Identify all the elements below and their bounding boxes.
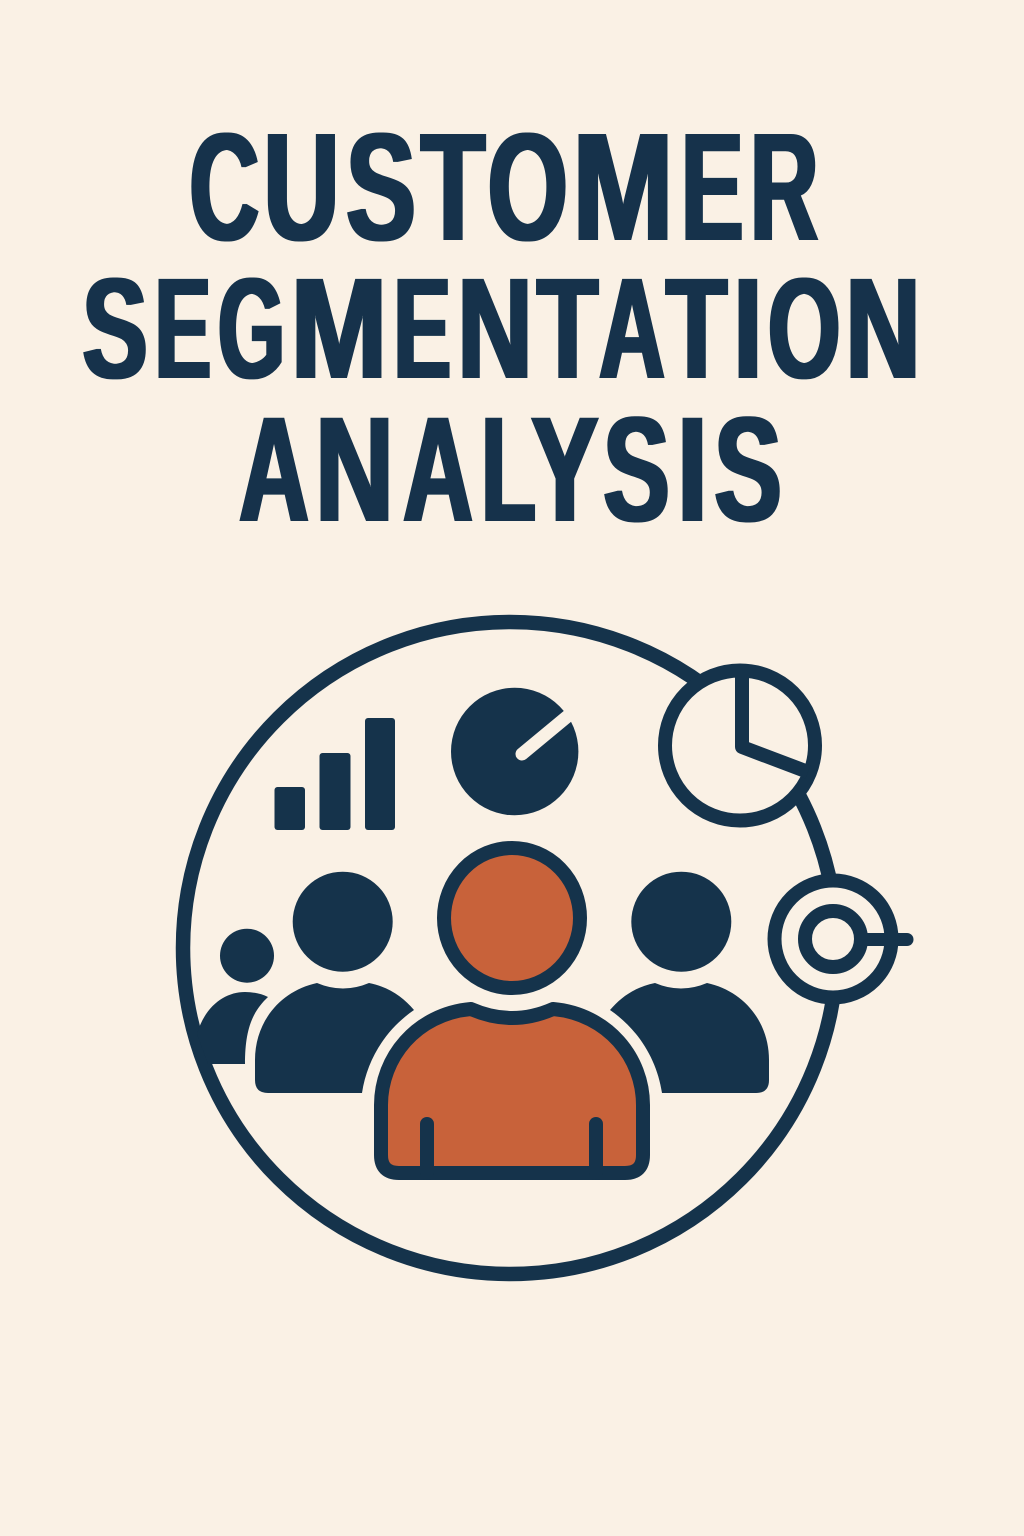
title line: CUSTOMER: S — [346, 101, 416, 273]
icon: target — [774, 880, 907, 998]
title line: ANALYSIS: S — [714, 385, 782, 553]
title line: SEGMENTATION: M — [291, 248, 387, 409]
icon: gauge — [451, 688, 592, 815]
title line: SEGMENTATION: T — [537, 248, 598, 409]
title line: SEGMENTATION: O — [768, 248, 840, 409]
title line: CUSTOMER: U — [264, 101, 339, 273]
title line: ANALYSIS: N — [315, 385, 394, 553]
title line: SEGMENTATION: S — [82, 248, 148, 409]
title line: CUSTOMER: C — [189, 101, 259, 273]
title line: CUSTOMER: M — [572, 101, 674, 273]
title line: ANALYSIS: Y — [531, 385, 599, 553]
title line: ANALYSIS: I — [677, 385, 708, 553]
title line: SEGMENTATION: T — [666, 248, 727, 409]
title line: SEGMENTATION: E — [394, 248, 451, 409]
person: right — [610, 872, 769, 1093]
title line: SEGMENTATION: G — [218, 248, 285, 409]
title line: CUSTOMER: O — [488, 101, 568, 273]
icon: pie chart — [665, 670, 815, 820]
title line: CUSTOMER: R — [750, 101, 818, 273]
person: left — [255, 872, 414, 1093]
segmentation emblem — [183, 622, 907, 1274]
title line: SEGMENTATION: I — [734, 248, 762, 409]
title line: CUSTOMER: E — [681, 101, 743, 273]
title line: CUSTOMER: T — [421, 101, 485, 273]
outer ring — [183, 622, 837, 1274]
icon: bar chart — [274, 718, 395, 830]
title line: SEGMENTATION: A — [599, 248, 665, 409]
title line: ANALYSIS: A — [403, 385, 473, 553]
title line: SEGMENTATION: E — [155, 248, 211, 409]
title line: ANALYSIS: S — [603, 385, 670, 553]
person: center highlighted — [381, 848, 643, 1173]
title line: ANALYSIS: L — [481, 385, 536, 553]
title line: SEGMENTATION: N — [458, 248, 532, 409]
title line: ANALYSIS: A — [239, 385, 309, 553]
title — [82, 101, 920, 553]
title line: SEGMENTATION: N — [846, 248, 920, 409]
person: small far left — [197, 929, 274, 1064]
